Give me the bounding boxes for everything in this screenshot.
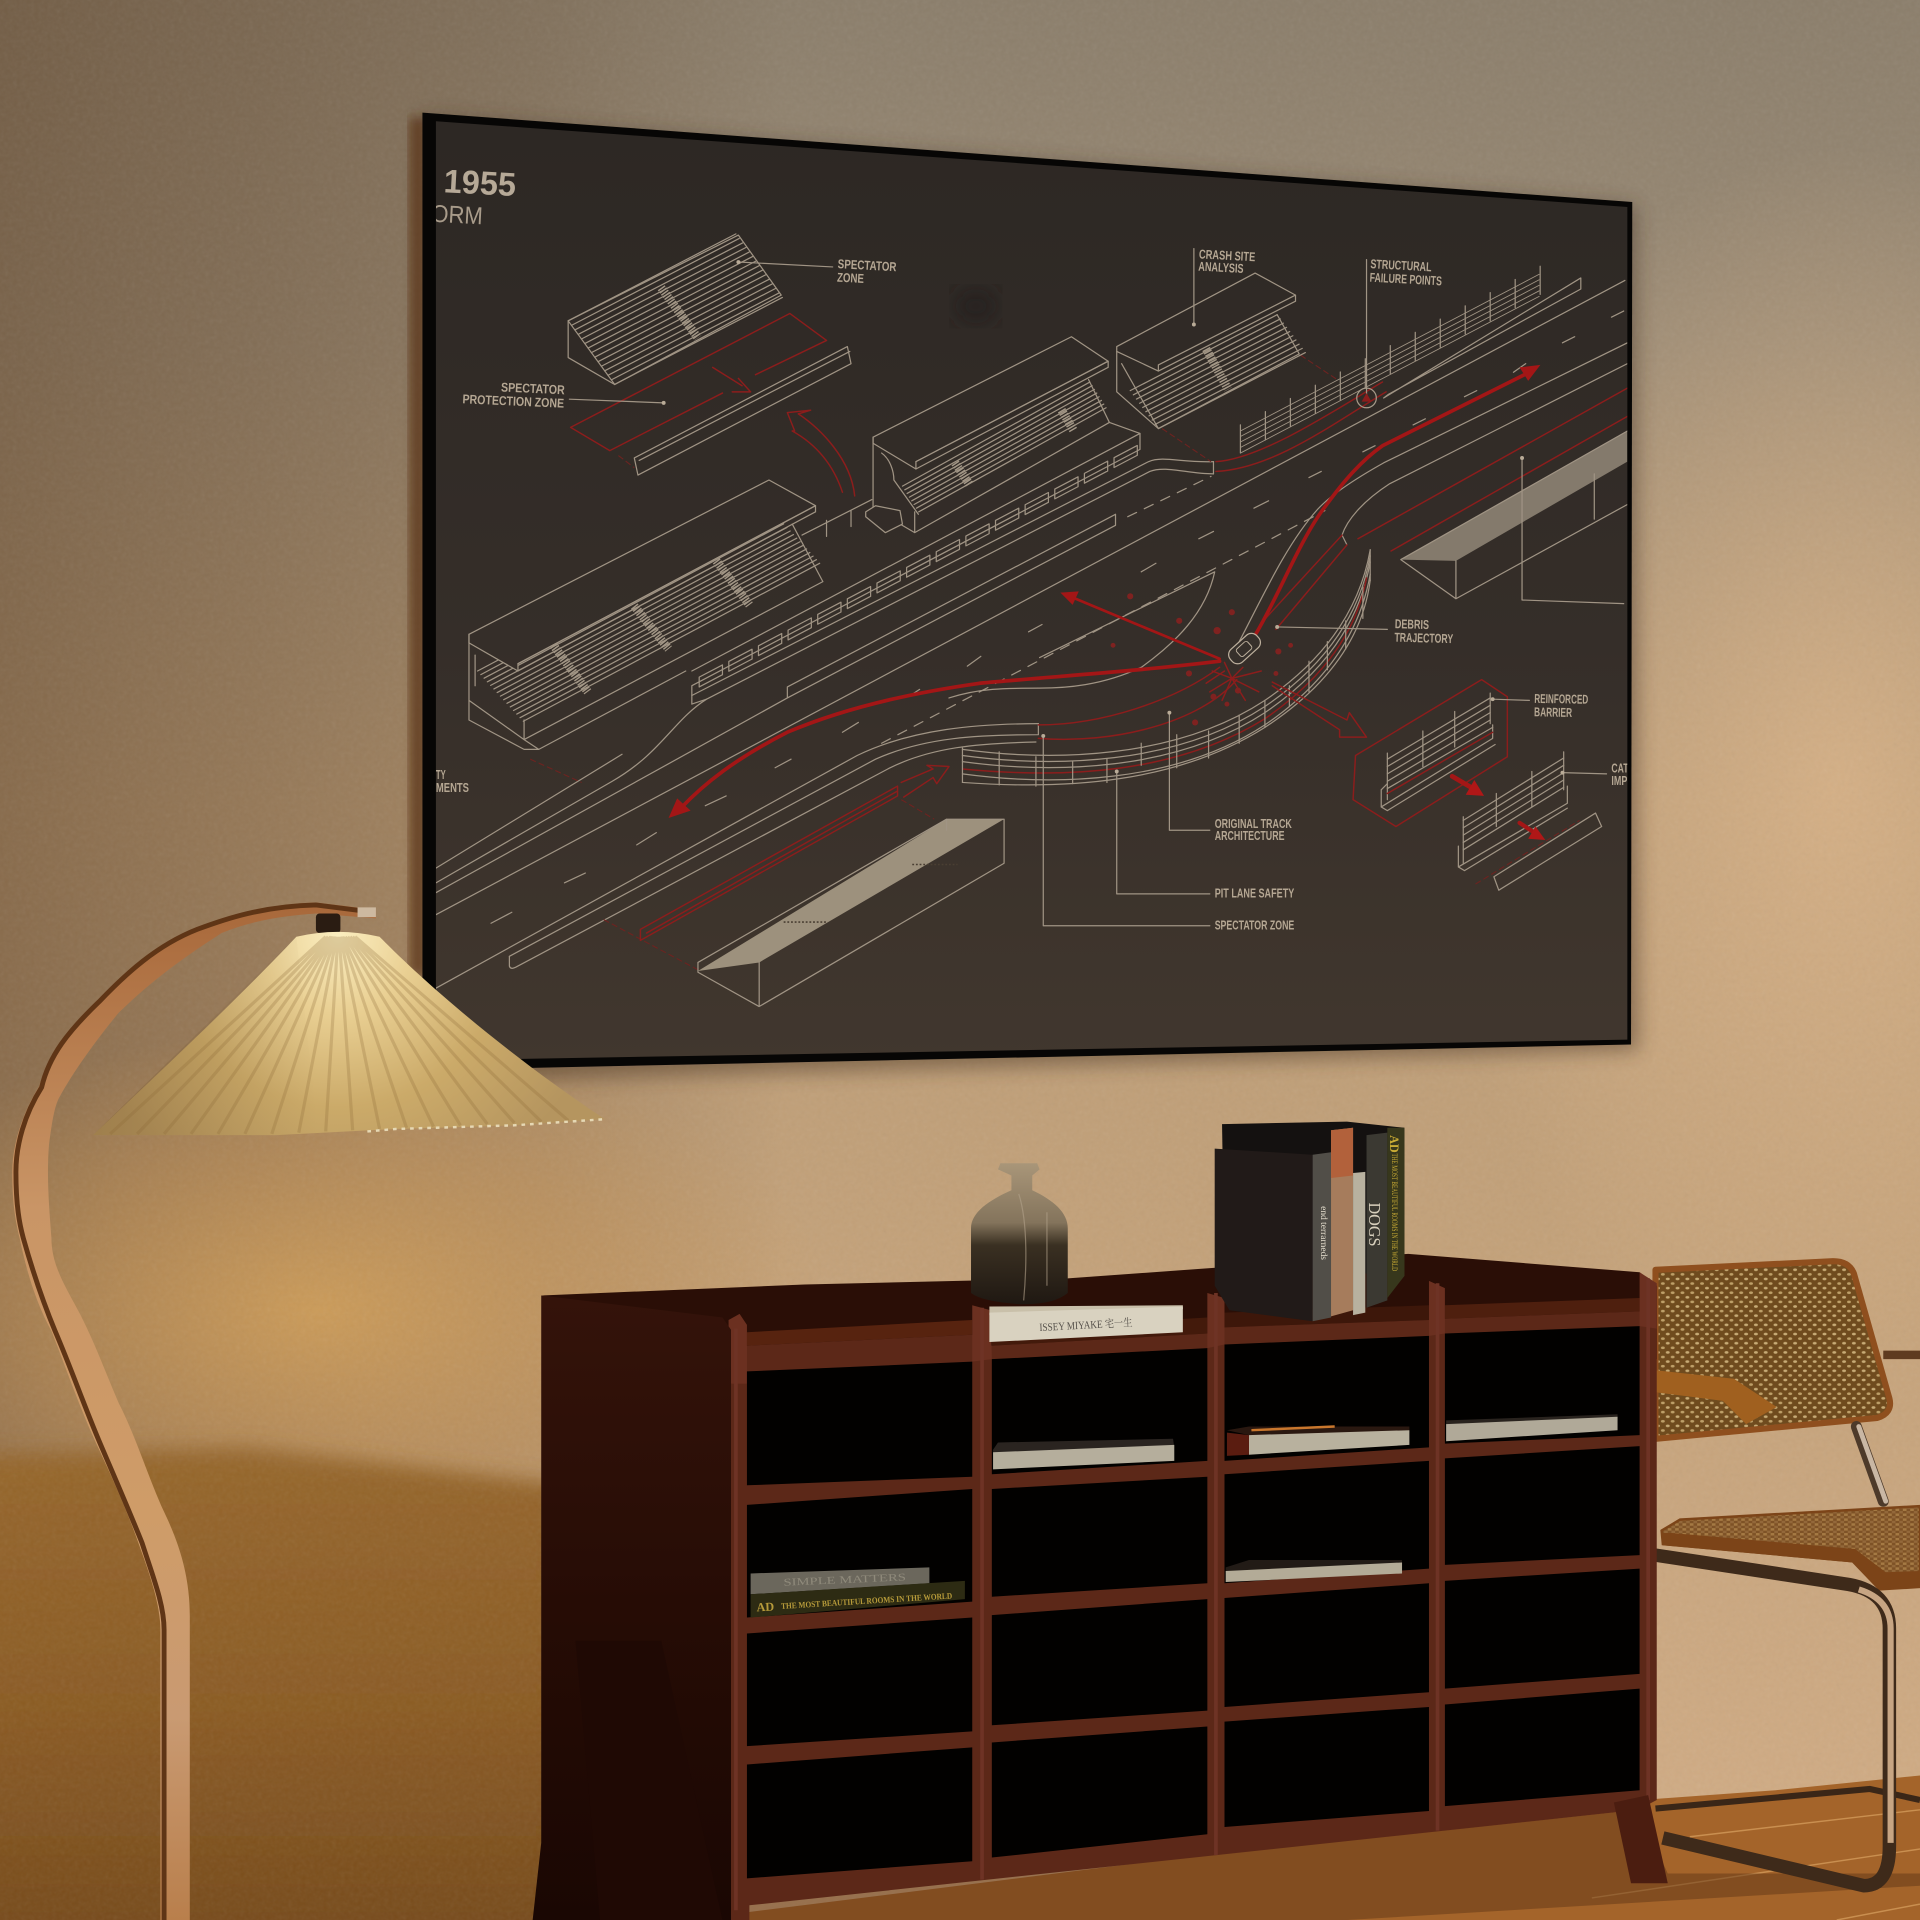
tray floors (747, 1298, 1640, 1346)
column 1 compartments (747, 1362, 972, 1878)
upper right safety fence (1240, 266, 1581, 453)
chair rear base tube (1656, 1789, 1920, 1809)
white issey miyake book (989, 1305, 1183, 1342)
book: AD rooms (751, 1581, 965, 1618)
label: original track architecture (1215, 816, 1292, 843)
poster frame (422, 113, 1632, 1070)
arrow: upper right trajectory (1256, 365, 1540, 633)
callout dots (662, 260, 1564, 775)
poster title (436, 170, 515, 224)
cabinet right leg (1614, 1795, 1668, 1883)
cabinet side panel (533, 1296, 731, 1920)
grey spine (1313, 1152, 1331, 1321)
book: simple matters: SIMPLE MATTERS (783, 1572, 906, 1589)
label: spectator protection zone (462, 378, 566, 411)
label: pit lane safety: PIT LANE SAFETY (1215, 886, 1295, 901)
callout leader lines (569, 249, 1624, 926)
label: reinforced barrier: BARRIER (1534, 704, 1573, 720)
label: clipped catch fence (1611, 761, 1629, 788)
chair front armrest (1656, 1370, 1777, 1424)
lamp shade left shading (93, 937, 318, 1135)
arrow: lower left trajectory (669, 661, 1220, 818)
lamp shade (93, 932, 605, 1135)
chair chrome upright (1856, 1427, 1886, 1501)
red channel and outline arrow (640, 765, 949, 940)
pale pages (1353, 1172, 1365, 1315)
label: spectator zone (837, 256, 897, 288)
cabinet front frame (729, 1311, 1657, 1920)
column 3 compartments (1224, 1336, 1429, 1827)
lamp arm tip (358, 907, 376, 917)
column 2 compartments (992, 1348, 1207, 1858)
label: structural failure points (1369, 256, 1443, 288)
label: structural failure points: STRUCTURAL (1370, 256, 1432, 274)
reinforced barrier module (1353, 680, 1507, 827)
label: debris trajectory: TRAJECTORY (1394, 630, 1454, 646)
red spectator protection zone (571, 313, 827, 468)
book stack (1215, 1122, 1404, 1321)
lamp shade pleats (110, 937, 568, 1134)
label: crash site analysis (1198, 246, 1256, 277)
detail stand: spectator zone (568, 234, 782, 384)
gatehouse and fence (802, 500, 902, 536)
cabinet top recess (541, 1254, 1657, 1384)
lamp shade serrated hem (367, 1119, 605, 1131)
pit garages row (692, 433, 1140, 704)
book: white column 2 (993, 1439, 1174, 1469)
AD spine: THE MOST BEAUTIFUL ROOMS IN THE WORLD (1390, 1153, 1399, 1271)
chair chrome frame (1656, 1555, 1889, 1886)
label: reinforced barrier (1534, 691, 1588, 720)
label: spectator zone: ZONE (837, 270, 865, 286)
cabinet post highlights (736, 1278, 1648, 1910)
curved guardrail barrier (962, 550, 1370, 786)
road and track lines (436, 280, 1627, 988)
label: debris trajectory: DEBRIS (1395, 616, 1430, 632)
stack front cover (1215, 1149, 1313, 1321)
arrow: outline lower right (1272, 682, 1367, 737)
poster artwork (431, 163, 1629, 1007)
cabinet left dark leg (576, 1641, 722, 1920)
crash site stand (1117, 273, 1305, 429)
catch fence module (1458, 752, 1580, 884)
label: spectator protection zone: PROTECTION ZONE (462, 391, 565, 411)
stack back (1222, 1122, 1404, 1273)
label: reinforced barrier: REINFORCED (1534, 691, 1588, 707)
red trace lines on track (530, 355, 1627, 970)
DOGS spine (1365, 1133, 1387, 1308)
right long stand (1401, 431, 1627, 599)
poster shadow on wall (409, 116, 1638, 1082)
book: column 3 lower (1226, 1560, 1402, 1582)
white issey miyake book: ISSEY MIYAKE 宅一生 (1039, 1315, 1133, 1334)
book: AD rooms: AD (756, 1600, 775, 1614)
red arrow to beam (1520, 823, 1534, 833)
cabinet (533, 1254, 1668, 1920)
label: clipped catch fence: IMP (1611, 773, 1628, 788)
poster title: 1955 (443, 163, 517, 204)
lower detail beam (1494, 813, 1602, 890)
DOGS spine: DOGS (1365, 1202, 1384, 1247)
label: debris trajectory (1394, 616, 1454, 646)
orange spine (1331, 1128, 1353, 1316)
grey spine: end terrarneds (1318, 1206, 1329, 1260)
book: simple matters (751, 1567, 929, 1594)
main red trajectory arrows (669, 365, 1540, 818)
crash debris (1111, 593, 1293, 726)
label: clipped catch fence: CAT (1611, 761, 1629, 776)
label: crash site analysis: ANALYSIS (1198, 259, 1244, 276)
arrow: debris upper left (1060, 591, 1220, 659)
main grandstand (469, 480, 823, 749)
chair (1656, 1261, 1920, 1886)
chair backrest (1656, 1261, 1890, 1439)
column 4 compartments (1445, 1326, 1640, 1806)
chair rear arm (1883, 1351, 1920, 1359)
floor (686, 1776, 1920, 1920)
poster title: ORM (431, 201, 483, 230)
label: clipped left caption (436, 767, 469, 795)
AD spine: AD (1387, 1135, 1401, 1153)
label: spectator protection zone: SPECTATOR (501, 380, 566, 397)
floor lamp (12, 902, 605, 1920)
label: clipped left caption: MENTS (436, 780, 469, 795)
detail beam (634, 347, 851, 475)
label: crash site analysis: CRASH SITE (1199, 246, 1256, 264)
label: original track architecture: ORIGINAL TRACK (1215, 816, 1292, 831)
lamp arm (12, 902, 376, 1920)
framed poster (422, 113, 1632, 1070)
chair seat (1662, 1506, 1920, 1589)
label: spectator zone lower: SPECTATOR ZONE (1215, 917, 1295, 932)
label: structural failure points: FAILURE POINTS (1369, 270, 1443, 288)
book: AD rooms: THE MOST BEAUTIFUL ROOMS IN THE WORLD (781, 1591, 952, 1611)
poster surface (436, 121, 1627, 1060)
curved red arrow (787, 410, 855, 496)
lower spectator stand (698, 819, 1004, 1007)
shelf books (751, 1414, 1618, 1618)
glass bottle (971, 1163, 1068, 1304)
book: red spine column 3 (1227, 1427, 1409, 1456)
lamp socket (316, 913, 340, 933)
cabinet post tops (729, 1272, 1657, 1384)
crashed car (1226, 630, 1263, 667)
book: column 4 (1446, 1414, 1618, 1441)
structural failure marker (1357, 388, 1376, 408)
label: clipped left caption: TY (436, 767, 446, 782)
label: original track architecture: ARCHITECTURE (1215, 828, 1285, 843)
label: spectator zone: SPECTATOR (837, 256, 897, 274)
AD spine (1387, 1128, 1404, 1298)
pit building stand (873, 337, 1140, 533)
red arrow between barriers (1452, 776, 1473, 789)
